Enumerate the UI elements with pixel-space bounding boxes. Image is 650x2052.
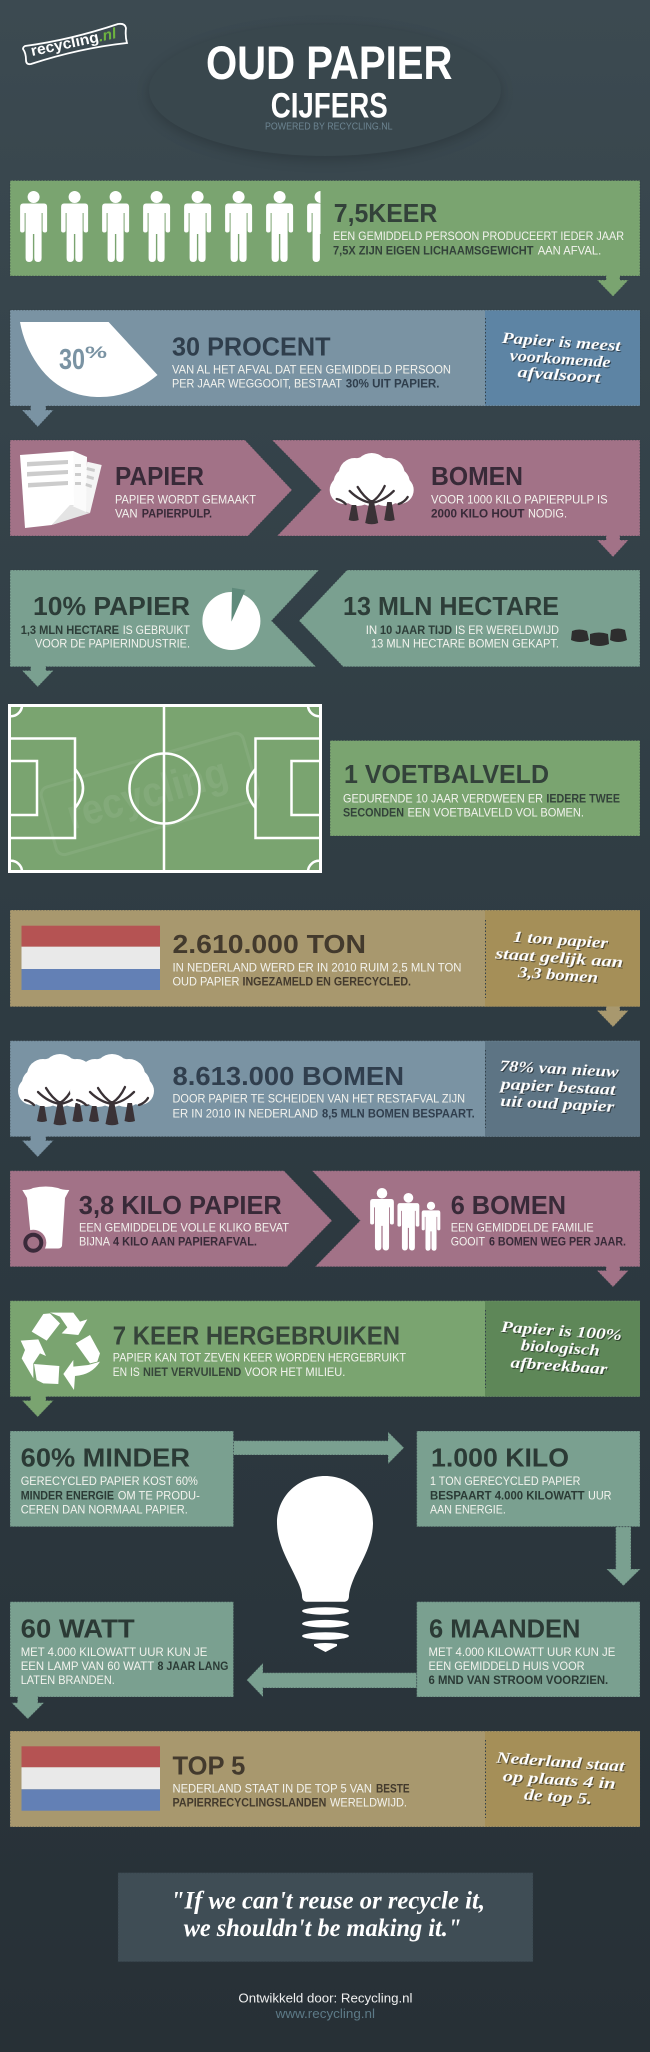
text block: BESPAART 4.000 KILOWATT xyxy=(430,1488,585,1502)
text block: EN IS xyxy=(113,1365,140,1379)
callout: Papier is meest xyxy=(501,330,622,355)
heading: 10% PAPIER xyxy=(33,591,190,621)
text block: PAPIER WORDT GEMAAKT xyxy=(115,492,256,506)
panel background with arrow xyxy=(10,310,640,427)
text block: 8,5 MLN BOMEN BESPAART. xyxy=(322,1106,475,1120)
panel background with arrow xyxy=(272,440,640,557)
panel background xyxy=(299,570,640,667)
heading: BOMEN xyxy=(431,461,523,491)
icon: tree xyxy=(330,453,414,524)
heading: 7 KEER HERGEBRUIKEN xyxy=(113,1320,400,1350)
panel background with arrow xyxy=(10,910,640,1027)
text block: 10 JAAR TIJD xyxy=(380,623,452,637)
text block: EEN GEMIDDELDE FAMILIE xyxy=(451,1221,594,1235)
heading: 7,5KEER xyxy=(334,198,438,228)
text block: NODIG. xyxy=(528,506,567,520)
text block: GEDURENDE 10 JAAR VERDWEEN ER xyxy=(343,791,543,805)
icon: family xyxy=(370,1188,440,1251)
icon: dutch flag xyxy=(22,1746,160,1811)
text block: 6 BOMEN WEG PER JAAR. xyxy=(489,1235,626,1249)
text block xyxy=(431,492,608,520)
text block: IS GEBRUIKT xyxy=(123,623,190,637)
side panel xyxy=(485,1301,640,1396)
heading: 13 MLN HECTARE xyxy=(343,591,559,621)
text block: PAPIER KAN TOT ZEVEN KEER WORDEN HERGEBRUIKT xyxy=(113,1351,406,1365)
callout: op plaats 4 in xyxy=(502,1768,616,1793)
callout xyxy=(497,1058,620,1116)
text block xyxy=(21,623,190,651)
text block xyxy=(79,1221,289,1249)
text block: IN NEDERLAND WERD ER IN 2010 RUIM 2,5 MLN TON xyxy=(172,961,462,975)
footer credit: Ontwikkeld door: Recycling.nl xyxy=(238,1991,413,2006)
text block: VAN xyxy=(115,506,138,520)
text block xyxy=(113,1351,406,1379)
heading: 8.613.000 BOMEN xyxy=(172,1061,404,1091)
text block: VAN AL HET AFVAL DAT EEN GEMIDDELD PERSOON xyxy=(172,362,451,376)
heading: 60% MINDER xyxy=(21,1443,190,1473)
text block: CEREN DAN NORMAAL PAPIER. xyxy=(21,1502,188,1516)
subtitle: powered by: POWERED BY RECYCLING.NL xyxy=(265,120,393,132)
icon: row of people xyxy=(20,191,334,262)
panel: top 5 xyxy=(10,1731,640,1827)
footer credit xyxy=(238,1991,413,2021)
panel background xyxy=(10,1171,332,1267)
text block xyxy=(172,961,462,989)
text block: MET 4.000 KILOWATT UUR KUN JE xyxy=(21,1645,207,1659)
icon: tree stumps xyxy=(571,628,627,646)
text block: PAPIERPULP. xyxy=(142,506,212,520)
text block: VOOR 1000 KILO PAPIERPULP IS xyxy=(431,492,608,506)
icon: recycle symbol xyxy=(21,1313,100,1390)
callout: voorkomende xyxy=(509,348,611,372)
heading: 30 PROCENT xyxy=(172,332,331,362)
callout xyxy=(499,330,622,388)
text block xyxy=(451,1221,626,1249)
text block: AAN AFVAL. xyxy=(538,243,601,257)
text block: EEN LAMP VAN 60 WATT xyxy=(21,1659,155,1673)
callout: Nederland staat xyxy=(495,1750,626,1776)
callout xyxy=(492,1750,626,1810)
panel background with arrow xyxy=(10,180,640,296)
panel: bomen xyxy=(272,440,640,557)
panel background with arrow xyxy=(10,1602,234,1719)
text block: SECONDEN xyxy=(343,806,404,820)
heading: TOP 5 xyxy=(172,1750,245,1780)
text block: EEN GEMIDDELD HUIS VOOR xyxy=(428,1659,585,1673)
text block: IN xyxy=(366,623,377,637)
side panel xyxy=(485,310,640,406)
callout: 1 ton papier xyxy=(513,929,610,952)
text block: NEDERLAND STAAT IN DE TOP 5 VAN xyxy=(172,1781,372,1795)
text block: UUR xyxy=(588,1488,612,1502)
text block: 1,3 MLN HECTARE xyxy=(21,623,119,637)
callout: 78% van nieuw xyxy=(499,1058,620,1081)
text block xyxy=(428,1645,615,1687)
text block xyxy=(21,1645,228,1687)
logo: recycling.nl: recycling xyxy=(29,29,100,60)
text block xyxy=(333,229,624,257)
panel background with arrow xyxy=(10,1041,640,1157)
panel: 8.613.000 bomen xyxy=(10,1041,640,1157)
text block xyxy=(172,1092,475,1120)
text block: LATEN BRANDEN. xyxy=(21,1673,115,1687)
text block: MET 4.000 KILOWATT UUR KUN JE xyxy=(428,1645,615,1659)
text block: AAN ENERGIE. xyxy=(430,1502,506,1516)
panel: 10% papier xyxy=(10,570,319,687)
panel: 7,5 keer xyxy=(10,180,640,296)
text block xyxy=(172,362,451,391)
callout: afbreekbaar xyxy=(510,1355,609,1378)
text block: PER JAAR WEGGOOIT, BESTAAT xyxy=(172,377,342,391)
text block: 6 MND VAN STROOM VOORZIEN. xyxy=(428,1673,608,1687)
heading: 6 BOMEN xyxy=(451,1190,566,1220)
football field xyxy=(9,705,321,872)
callout: afvalsoort xyxy=(517,364,602,387)
side panel xyxy=(485,1732,640,1826)
text block: VOOR HET MILIEU. xyxy=(245,1365,345,1379)
heading: 2.610.000 TON xyxy=(172,929,366,959)
arrow: to 60 watt xyxy=(247,1663,417,1697)
text block xyxy=(115,492,256,520)
title ellipse badge xyxy=(149,24,501,156)
text block: MINDER ENERGIE xyxy=(21,1488,114,1502)
panel: 13 mln hectare xyxy=(299,570,640,667)
heading: 60 WATT xyxy=(21,1614,135,1644)
callout: Papier is 100% xyxy=(500,1319,622,1344)
text block xyxy=(343,791,620,820)
panel: quote xyxy=(118,1873,533,1962)
chart: 30 percent segment xyxy=(20,322,158,397)
text block: BESTE xyxy=(376,1781,410,1795)
panel: 1.000 kilo xyxy=(417,1431,640,1527)
panel: 60 watt xyxy=(10,1602,234,1719)
side panel xyxy=(485,1041,640,1136)
callout: uit oud papier xyxy=(500,1093,616,1116)
text block: 7,5X ZIJN EIGEN LICHAAMSGEWICHT xyxy=(333,243,534,257)
text block xyxy=(366,623,559,651)
callout: staat gelijk aan xyxy=(493,945,624,971)
side panel xyxy=(485,910,640,1006)
callout: 3,3 bomen xyxy=(516,964,599,987)
text block: OM TE PRODU- xyxy=(118,1488,200,1502)
panel background with arrow xyxy=(10,1301,640,1417)
text block: INGEZAMELD EN GERECYCLED. xyxy=(242,975,411,989)
text block: NIET VERVUILEND xyxy=(143,1365,241,1379)
text block: IEDERE TWEE xyxy=(546,791,620,805)
text block: 2000 KILO HOUT xyxy=(431,506,525,520)
quote text: we shouldn't be making it." xyxy=(184,1915,461,1942)
title: CIJFERS xyxy=(271,86,388,125)
text block xyxy=(21,1474,200,1516)
panel background with arrow xyxy=(10,570,319,687)
arrow: to 1.000 kilo xyxy=(234,1432,404,1464)
icon: wheelie bin xyxy=(20,1186,69,1256)
panel: 1 voetbalveld xyxy=(330,740,640,836)
icon: dutch flag xyxy=(22,926,160,990)
callout: de top 5. xyxy=(524,1787,593,1808)
text block: IS ER WERELDWIJD xyxy=(455,623,559,637)
text block: OUD PAPIER xyxy=(172,975,240,989)
panel: papier xyxy=(10,440,292,536)
text block: 8 JAAR LANG xyxy=(158,1659,228,1673)
title xyxy=(206,36,452,125)
callout: biologisch xyxy=(520,1337,600,1360)
heading: 1.000 KILO xyxy=(431,1443,569,1473)
watermark: recycling xyxy=(61,748,233,838)
text block xyxy=(172,1781,410,1810)
panel: 2.610.000 ton xyxy=(10,910,640,1027)
text block: 13 MLN HECTARE BOMEN GEKAPT. xyxy=(371,637,559,651)
panel: 60% minder xyxy=(10,1431,234,1527)
text block: 4 KILO AAN PAPIERAFVAL. xyxy=(113,1235,257,1249)
chart: pie 10 percent xyxy=(202,588,260,650)
heading: 1 VOETBALVELD xyxy=(344,759,549,789)
text block: EEN VOETBALVELD VOL BOMEN. xyxy=(408,806,584,820)
panel: 6 maanden xyxy=(417,1602,640,1697)
text block: DOOR PAPIER TE SCHEIDEN VAN HET RESTAFVAL ZIJN xyxy=(172,1092,465,1106)
text block: GOOIT xyxy=(451,1235,485,1249)
text block: 1 TON GERECYCLED PAPIER xyxy=(430,1474,580,1488)
logo: recycling.nl xyxy=(23,24,127,64)
text block: GERECYCLED PAPIER KOST 60% xyxy=(21,1474,198,1488)
text block: ER IN 2010 IN NEDERLAND xyxy=(172,1106,318,1120)
text block: 30% UIT PAPIER. xyxy=(346,377,440,391)
icon: light bulb xyxy=(277,1476,373,1652)
text block: BIJNA xyxy=(79,1235,111,1249)
footer credit: www.recycling.nl xyxy=(275,2006,375,2021)
watermark xyxy=(39,731,260,856)
text block: WERELDWIJD. xyxy=(330,1796,407,1810)
callout: papier bestaat xyxy=(498,1076,617,1099)
chart: 30 percent segment: % xyxy=(85,343,107,362)
panel background with arrow xyxy=(312,1171,640,1287)
heading: PAPIER xyxy=(115,461,204,491)
text block: PAPIERRECYCLINGSLANDEN xyxy=(172,1796,326,1810)
icon: two trees xyxy=(18,1054,154,1125)
panel: 30 procent xyxy=(10,310,640,427)
quote text: "If we can't reuse or recycle it, xyxy=(171,1887,485,1914)
heading: 3,8 KILO PAPIER xyxy=(79,1190,282,1220)
panel: 3,8 kilo papier xyxy=(10,1171,332,1267)
panel background xyxy=(10,440,292,536)
quote text xyxy=(171,1887,485,1942)
text block xyxy=(430,1474,612,1516)
chart: 30 percent segment: 30 xyxy=(59,344,85,376)
logo: recycling.nl: .nl xyxy=(97,25,119,46)
panel: 7 keer hergebruiken xyxy=(10,1301,640,1417)
text block: VOOR DE PAPIERINDUSTRIE. xyxy=(35,637,190,651)
icon: paper sheets xyxy=(20,451,102,528)
arrow: to 6 maanden xyxy=(606,1527,640,1586)
panel: 6 bomen xyxy=(312,1171,640,1287)
callout xyxy=(492,928,625,988)
callout xyxy=(498,1319,622,1379)
title: OUD PAPIER xyxy=(206,36,452,89)
heading: 6 MAANDEN xyxy=(429,1614,580,1644)
text block: EEN GEMIDDELDE VOLLE KLIKO BEVAT xyxy=(79,1221,289,1235)
